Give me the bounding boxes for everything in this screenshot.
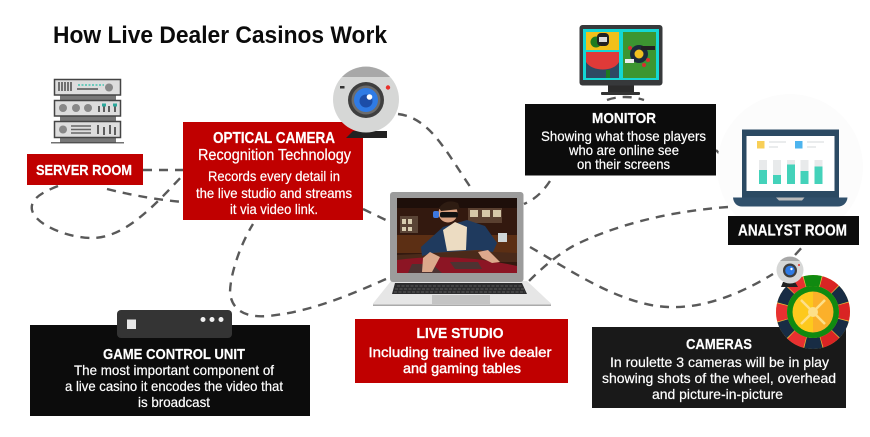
panel: game control unit: The most important component of <box>74 362 274 378</box>
panel: cameras: and picture-in-picture <box>652 386 783 402</box>
panel: monitor: Showing what those players <box>541 128 706 144</box>
panel: optical camera: OPTICAL CAMERA <box>213 130 335 147</box>
panel: server room label <box>27 154 143 185</box>
panel: server room icon <box>51 80 124 143</box>
panel: server room label: SERVER ROOM <box>36 162 132 179</box>
panel: game control unit <box>30 325 310 416</box>
panel: monitor <box>525 104 716 176</box>
panel: optical camera <box>183 122 363 220</box>
panel: cameras: In roulette 3 cameras will be in play <box>610 354 829 370</box>
panel: optical camera: the live studio and streams <box>196 185 352 201</box>
panel: cameras: CAMERAS <box>686 336 752 353</box>
panel: analyst room label <box>728 216 859 245</box>
panel: game control unit: GAME CONTROL UNIT <box>103 346 245 363</box>
panel: optical camera: it via video link. <box>230 201 318 217</box>
panel: live studio: and gaming tables <box>403 360 521 376</box>
panel: game control unit: is broadcast <box>138 394 210 410</box>
icon: game control unit device <box>117 310 232 338</box>
panel: optical camera: Records every detail in <box>208 168 340 184</box>
panel: analyst room label: ANALYST ROOM <box>738 222 847 240</box>
icon: main laptop live studio <box>373 192 551 306</box>
panel: live studio: Including trained live dealer <box>368 344 552 360</box>
icon: monitor <box>580 25 662 95</box>
icon: webcam <box>333 66 399 138</box>
panel: monitor: on their screens <box>577 156 670 172</box>
title: How Live Dealer Casinos Work <box>53 22 388 49</box>
panel: monitor: MONITOR <box>592 110 656 127</box>
icon: analyst laptop <box>717 94 863 240</box>
panel: monitor: who are online see <box>568 142 679 158</box>
dashed connector lines <box>32 97 805 316</box>
panel: cameras <box>592 327 846 408</box>
panel: cameras: showing shots of the wheel, overhead <box>602 370 836 386</box>
icon: roulette wheel <box>760 259 866 365</box>
panel: live studio: LIVE STUDIO <box>416 325 504 342</box>
panel: live studio <box>355 319 568 383</box>
panel: game control unit: a live casino it encodes the video that <box>65 378 283 394</box>
icon: small webcam <box>776 256 804 287</box>
panel: optical camera: Recognition Technology <box>198 147 351 164</box>
